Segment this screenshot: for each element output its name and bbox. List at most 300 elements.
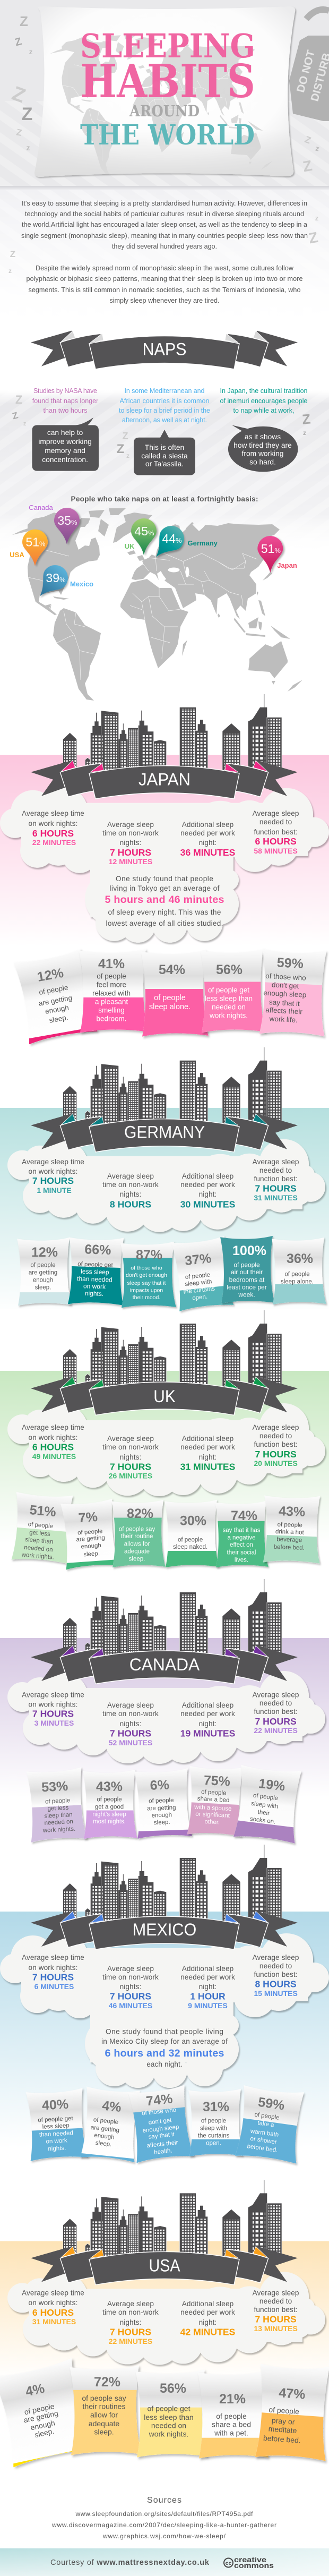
stat: sleep on work nights: on work nights: [29,2299,77,2307]
stat: sleep on non-work nights: nights: [120,1983,141,1991]
pillow: 4% enough sleep: of people [23,2402,55,2416]
naps background [0,390,329,555]
pillow: 7% enough sleep: 7% [78,1509,98,1525]
map pin: Mexico 39% [30,560,93,604]
icon: sleeping z letters around pillow: Z [303,134,313,146]
callout: siesta bubble [134,430,195,475]
stat: sleep on work nights: Average sleep time [22,1954,84,1961]
pillow: 31% curtains open: the curtains [198,2133,229,2139]
callout: Tokyo sleep [105,875,224,927]
banner: UK: UK [153,1387,176,1406]
map pin: Japan 51%: 51% [261,542,281,556]
map pin: Germany 44%: 44% [162,532,182,545]
stat: sleep on work nights: 22 MINUTES [32,838,76,847]
cloud: Canada [7,1671,325,1764]
pillow: 7% enough sleep: enough [81,1542,101,1550]
pillow: 43% good night's sleep: of people [97,1796,122,1803]
stat: additional sleep needed [180,2300,236,2337]
stat: sleep on non-work nights: time on non-work [102,1710,159,1718]
icon: do not disturb door hanger [289,10,329,121]
stat: sleep on non-work nights: Average sleep [107,1172,154,1180]
stat: sleep on non-work nights [102,1701,159,1747]
callout: Mexico City sleep: each night. [146,2060,183,2068]
title: THE WORLD [80,119,255,151]
pillow: 87% mood [119,1242,179,1311]
pillow: 19% socks on [233,1768,303,1846]
pillow: 12% enough sleep: 12% [36,966,65,985]
stat: sleep on work nights: on work nights: [29,1701,77,1708]
pillow: 87% mood: their mood. [133,1294,160,1301]
callout: Tokyo sleep: One study found that people [116,875,213,883]
pillow: 56% less sleep: 56% [160,2381,186,2396]
banner: naps: NAPS [142,340,187,359]
skyline: Japan [63,694,282,774]
icon: z letters around naps text: z [23,421,27,427]
stat: sleep on non-work nights [102,1172,159,1210]
stat: sleep on work nights [22,809,84,847]
stat: sleep on work nights: Average sleep time [22,1158,84,1166]
pillow: 51% less sleep: needed on [24,1545,53,1553]
pillow: 87% mood: sleep say that it [127,1280,166,1286]
stat: sleep needed to function: 20 MINUTES [254,1459,298,1468]
pillow: 37% curtains open: of people [185,1272,211,1281]
intro text: they did several hundred years ago. [112,243,217,250]
pillow: 12% enough sleep: enough [33,1277,53,1283]
pillow: 74% health: don't get [148,2117,172,2126]
pillow: 47% pray or meditate: pray or [271,2416,295,2426]
pillow: 40% less sleep: less sleep [42,2122,70,2130]
pillow: 41% relaxed: 41% [98,957,125,971]
pillow: 72% routines: of people say [82,2394,126,2402]
pillow: 6% enough sleep [133,1768,195,1842]
stat: sleep on non-work nights: nights: [120,1720,141,1728]
pillow: 56% less sleep: of people get [208,986,249,994]
pillow: 4% enough sleep: are getting [90,2125,120,2134]
stat: sleep on non-work nights: 46 MINUTES [109,2001,152,2010]
pillow: 4% enough sleep: enough [30,2418,56,2432]
pillow: 4% enough sleep: enough [94,2133,115,2141]
icon: sleeping z letters around pillow: z [315,144,321,153]
icon: sleeping z letters around pillow: Z [20,13,28,29]
pillow: 47% pray or meditate: meditate [268,2424,297,2435]
banner: UK [31,1377,298,1415]
pillow: 74% social lives [213,1501,272,1571]
panel: Germany [0,1047,329,1316]
icon: sleeping z letters around pillow: Z [9,82,28,107]
callout: Mexico City sleep: 6 hours and 32 minutes [105,2048,224,2059]
pillow: 41% relaxed [80,950,148,1036]
icon: sleeping z letters around pillow [8,13,321,275]
map pin: Germany 44%: Germany [188,539,218,547]
skyline: Mexico [63,1845,282,1924]
pillow: 12% enough sleep [15,950,100,1046]
cloud: UK [7,1403,325,1496]
pillow: 43% good night's sleep: night's sleep [92,1811,126,1818]
stat: sleep on work nights: 7 HOURS [32,1972,74,1982]
stat: sleep on non-work nights: Average sleep [107,1965,154,1973]
pillow: 72% routines: adequate [89,2419,119,2428]
stat: sleep on non-work nights [102,1435,159,1480]
pillow: 59% warm bath: before bed. [247,2143,278,2154]
heading: map: People who take naps on at least a fortnightly basis: [71,495,258,503]
icon: sleeping z letters around pillow: z [29,48,33,56]
pillow: 51% less sleep [12,1492,74,1566]
pillow: 56% less sleep: work nights. [209,1011,248,1020]
pillow: 87% mood: impacts upon [130,1287,163,1294]
stat: additional sleep needed: needed per work [180,1181,235,1189]
pillow: 74% social lives: say that it has [223,1528,261,1534]
stat: sleep on non-work nights: time on non-work [102,1973,159,1981]
intro text: Despite the widely spread norm of monophasic sleep in the west, some cultures follow [36,265,294,272]
stat: additional sleep needed: 19 MINUTES [180,1728,236,1739]
text block: Mediterranean naps [119,387,210,424]
cloud: Mexico [0,1932,329,2088]
pillow: 66% less sleep [68,1238,125,1308]
stat: sleep on non-work nights: time on non-work [102,1181,159,1189]
pillow: 75% share a bed: other. [204,1819,220,1826]
pillow: 30% sleep naked [163,1500,222,1571]
icon: do not disturb door hanger: DO NOT [295,49,317,94]
stat: sleep on work nights: 7 HOURS [32,1175,74,1186]
sources [51,2496,276,2540]
pillow: 82% routine: sleep. [129,1556,145,1563]
callout: siesta bubble: called a siesta [141,452,188,460]
text block: NASA naps: than two hours [44,407,87,414]
icon: z letters around naps text: z [303,429,306,437]
pillow: 4% enough sleep: sleep. [95,2140,112,2148]
stat: sleep needed to function [253,809,299,855]
pillow: 37% curtains open: sleep with [185,1278,212,1287]
callout: memory bubble [32,417,99,471]
icon: sleeping z letters around pillow: Z [307,229,319,246]
pillow: 12% enough sleep: sleep. [35,1284,51,1291]
stat: sleep on non-work nights: nights: [120,1190,141,1198]
pillow: 37% curtains open: the curtains [183,1286,215,1295]
pillow: 82% routine: adequate [124,1549,150,1555]
pillow: 59% work life: say that it [269,998,300,1008]
icon: z letters around naps text [11,393,311,459]
pillow: 59% warm bath: or shower [250,2136,278,2146]
stat: sleep on work nights: 6 MINUTES [34,1982,74,1991]
header background [0,0,329,329]
panel: Mexico [0,1845,329,2169]
skyline: Canada [63,1579,282,1659]
banner: Canada [31,1645,298,1684]
pillow: 74% social lives: a negative [227,1535,256,1541]
stat: sleep on non-work nights: time on non-work [102,1443,159,1451]
stat: sleep needed to function: 58 MINUTES [254,847,298,855]
intro text: single segment (monophasic sleep), meaning that in many countries people sleep less now than [21,232,308,240]
stat: sleep needed to function: Average sleep [253,2289,299,2297]
stat: sleep on non-work nights: time on non-work [102,2308,159,2316]
stat: sleep on non-work nights: 7 HOURS [110,847,151,858]
pillow: 19% socks on: socks on. [249,1816,276,1826]
map pin: Mexico 39%: 39% [46,571,66,585]
pillow: 6% enough sleep: enough [151,1812,172,1819]
stat: sleep on non-work nights: nights: [120,1453,141,1461]
stat: sleep on non-work nights: time on non-work [102,829,159,837]
stat: additional sleep needed: 30 MINUTES [180,1199,236,1210]
pillow: 12% enough sleep: are getting [29,1269,57,1276]
pillow: 59% warm bath: of people [254,2111,280,2121]
sources: Sources [147,2496,181,2505]
pillow: 54% sleep alone: sleep alone. [149,1003,191,1011]
pillow: 74% social lives: effect on [230,1542,253,1548]
pillow: 66% less sleep: than needed [77,1275,112,1284]
callout: tired oval bubble: from working [242,449,283,458]
callout: Tokyo sleep: lowest average of all cities studied. [106,919,223,927]
pillow: 56% less sleep: needed on [212,1003,246,1011]
stat: additional sleep needed [180,1435,236,1472]
pillow: 4% enough sleep: of people [93,2117,119,2126]
pillow: 51% less sleep: work nights. [21,1551,54,1561]
icon: sleeping z letters around pillow: Z [15,127,23,138]
pillow: 6% enough sleep: 6% [150,1778,169,1793]
stat: sleep needed to function: 22 MINUTES [254,1726,298,1735]
banner: Mexico [31,1911,298,1949]
pillow: 37% curtains open: 37% [184,1251,212,1268]
pillow: 72% routines: 72% [94,2375,120,2390]
stat: additional sleep needed: needed per work [180,829,235,837]
callout: siesta bubble: This is often [145,443,184,451]
pillow: 59% work life: 59% [276,955,304,971]
pillow: 30% sleep naked: of people [178,1537,203,1543]
text block: Mediterranean naps: African countries it is common [120,397,210,405]
pillow: 82% routine [110,1500,169,1571]
stat: sleep on non-work nights [102,821,159,866]
stat: sleep on work nights: 1 MINUTE [37,1186,72,1195]
pillow: 53% less sleep: needed on [44,1819,73,1827]
pillow: 100% air out bedrooms: week. [238,1291,255,1298]
stat: sleep on work nights: on work nights: [29,1434,77,1441]
stat: sleep needed to function: needed to [259,2297,292,2305]
map pin: UK 45%: UK [125,542,135,550]
stat: additional sleep needed [180,1701,236,1739]
text block: Japan inemuri: to nap while at work, [233,407,294,414]
map pin: Japan 51% [257,536,297,573]
stat: additional sleep needed: 9 MINUTES [188,2001,228,2010]
pillow: 6% enough sleep: of people [149,1797,174,1804]
pillow: 100% air out bedrooms: bedrooms at [229,1276,265,1283]
pillow: 75% share a bed [187,1772,243,1839]
stat: sleep needed to function: 7 HOURS [255,2314,297,2324]
pillow: 37% curtains open [173,1236,236,1313]
stat: additional sleep needed: night: [199,2318,217,2326]
pillow: 51% less sleep: get less [29,1529,51,1538]
stat: sleep needed to function: needed to [259,1166,292,1174]
stat: sleep needed to function: 8 HOURS [255,1979,297,1990]
stat: sleep needed to function: function best: [254,1708,298,1716]
pillow: 51% less sleep: of people [28,1521,53,1530]
pillow: 75% share a bed: or significant [195,1811,230,1819]
skyline: UK [63,1310,282,1390]
icon: z letters around naps text: z [126,452,129,459]
pillow: 59% work life: of those who [265,972,306,982]
pillow: 12% enough sleep: 12% [31,1245,58,1260]
pillow: 59% work life [259,950,328,1039]
pillow: 87% mood: don't get enough [126,1272,167,1278]
stat: additional sleep needed [180,1965,235,2010]
pillow: 4% enough sleep [0,2358,75,2470]
stat: sleep on non-work nights: 26 MINUTES [109,1471,152,1480]
text block: Mediterranean naps: to sleep for a brief period in the [119,407,210,414]
map pin: USA 51%: 51% [25,535,46,549]
title: HABITS [80,55,255,108]
banner: naps [31,331,298,369]
pillow: 66% less sleep: less sleep [81,1268,109,1276]
pillow: 43% hot beverage: 43% [279,1504,306,1520]
pillow: 74% health: enough sleep [142,2124,179,2134]
pillow: 100% air out bedrooms: of people [233,1261,260,1268]
stat: additional sleep needed: Additional sleep [182,1435,233,1443]
map pin: Japan 51%: Japan [277,561,297,569]
pillow: 41% relaxed: a pleasant [95,997,128,1006]
pillow: 59% work life: don't get [272,980,299,990]
pillow: 4% enough sleep: 4% [24,2381,46,2399]
callout: tired oval bubble: how tired they are [233,441,292,449]
pillow: 56% less sleep: less sleep than [144,2413,194,2421]
stat: additional sleep needed: Additional sleep [182,2300,233,2308]
stat: additional sleep needed [180,821,236,858]
stat: sleep on work nights: Average sleep time [22,1423,84,1431]
stat: sleep on work nights: 6 HOURS [32,2307,74,2318]
icon: z letters around naps text: Z [301,411,311,428]
pillow: 43% good night's sleep: most nights. [93,1819,126,1825]
stat: sleep needed to function: needed to [259,1962,292,1970]
banner: Japan: JAPAN [138,770,191,789]
intro text: polyphasic or biphasic sleep patterns, meaning that their sleep is broken up into two or more [27,275,302,283]
pillow: 59% work life: work life. [269,1014,298,1024]
pillow: 41% relaxed: bedroom. [96,1014,127,1023]
title [80,27,255,151]
pillow: 66% less sleep: of people get [77,1261,114,1269]
pillow: 87% mood: of those who [131,1265,162,1272]
pillow: 21% share a bed with a pet: of people [216,2412,247,2420]
pillow: 56% less sleep: needed on [151,2421,186,2429]
pillow: 72% routines: their routines [83,2402,125,2410]
pillow: 51% less sleep: sleep than [25,1537,54,1545]
stat: sleep needed to function: function best: [254,1971,298,1978]
icon: sleeping z letters around pillow: z [8,267,12,275]
icon: z letters around naps text: Z [117,442,124,456]
stat: additional sleep needed: needed per work [180,1973,235,1981]
stat: sleep on non-work nights: 8 HOURS [110,1199,151,1210]
intro text: segments. This is still common in nomadic societies, such as the Temiars of Indonesia, who [29,286,300,294]
pillow: 41% relaxed: feel more [97,980,126,989]
text block: NASA naps: found that naps longer [32,397,98,405]
text block: Japan inemuri [220,387,308,414]
intro text [21,200,308,304]
stat: sleep needed to function: Average sleep [253,809,299,817]
pillow: 53% less sleep: sleep than [44,1812,73,1820]
icon: sleeping z letters around pillow: Z [14,36,23,48]
pillow: 75% share a bed: share a bed [197,1796,230,1804]
intro text: It's easy to assume that sleeping is a pretty standardised human activity. However, differences in [22,200,307,207]
callout: Mexico City sleep: One study found that people living [106,2028,223,2035]
sources: www.graphics.wsj.com/how-we-sleep/ [102,2532,226,2540]
pillow: 47% pray or meditate: before bed. [263,2434,301,2445]
callout: memory bubble: can help to [47,429,83,437]
stat: additional sleep needed: Additional sleep [182,1701,233,1709]
stat: additional sleep needed: needed per work [180,1443,235,1451]
stat: sleep on work nights: 31 MINUTES [32,2317,76,2326]
pillow: 82% routine: of people say [119,1526,155,1533]
stat: sleep on work nights [22,1423,84,1461]
stat: sleep on non-work nights [102,2300,159,2345]
footer [0,2548,329,2576]
stat: sleep on non-work nights: 7 HOURS [110,1462,151,1472]
pillow: 75% share a bed: 75% [203,1773,231,1789]
text block: NASA naps [32,387,98,414]
stat: sleep on work nights: 7 HOURS [32,1708,74,1719]
callout: Tokyo sleep: living in Tokyo get an average of [109,884,220,892]
icon: sleeping z letters around pillow: z [315,214,319,222]
pillow: 36% sleep alone [270,1238,329,1308]
pillow: 75% share a bed: with a spouse [194,1804,232,1812]
pillow: 7% enough sleep [59,1498,122,1573]
callout: siesta bubble: or Ta'assila. [145,460,184,468]
icon: sleeping z letters around pillow: z [27,143,30,152]
stat: sleep needed to function [253,1423,299,1468]
pillow: 100% air out bedrooms: 100% [232,1243,266,1258]
pillow: 53% less sleep: of people [45,1797,71,1805]
pillow: 31% curtains open: of people [201,2118,226,2125]
pillow: 74% health: of those who [142,2107,177,2117]
pillow: 21% share a bed with a pet: 21% [219,2392,246,2407]
callout: Mexico City sleep: in Mexico City sleep for an average of [101,2037,228,2045]
stat: sleep needed to function: 13 MINUTES [254,2324,298,2333]
map pin: Germany 44% [146,521,218,565]
pillow: 31% curtains open [187,2089,246,2161]
stat: sleep needed to function: function best: [254,1440,298,1448]
pillow: 75% share a bed: of people [201,1789,227,1797]
pillow: 47% pray or meditate: 47% [278,2385,306,2402]
stat: sleep on non-work nights: nights: [120,2318,141,2326]
stat: sleep needed to function: function best: [254,2306,298,2314]
pillow: 59% warm bath: warm bath [249,2128,279,2138]
stat: sleep on work nights: 6 HOURS [32,828,74,839]
stat: sleep needed to function: Average sleep [253,1954,299,1961]
pillow: 74% social lives: their social [227,1550,256,1556]
pillow: 66% less sleep: nights. [85,1290,103,1298]
pillow: 6% enough sleep: sleep. [154,1819,170,1826]
icon: sleeping z letters around pillow: Z [10,249,15,259]
stat: additional sleep needed: 42 MINUTES [180,2326,236,2337]
stat: sleep on non-work nights: 7 HOURS [110,1991,151,2001]
stat: sleep needed to function [253,1691,299,1735]
stat: sleep needed to function [253,1158,299,1202]
pillow: 43% hot beverage: beverage [276,1537,302,1543]
pillow: 59% work life: affects their [265,1006,303,1016]
pillow: 43% hot beverage [263,1496,322,1566]
skyline: Germany [63,1047,282,1127]
icon: sleeping z letters around pillow: Z [22,104,32,124]
banner: Germany: GERMANY [124,1123,205,1142]
pillow: 12% enough sleep: are getting [38,994,73,1008]
callout: memory bubble: improve working [38,438,92,446]
pillow: 56% less sleep [134,2369,212,2461]
callout: Mexico City sleep [101,2028,228,2068]
map pin: Canada 35% [29,504,80,544]
map pin: USA 51%: USA [10,551,24,559]
stat: additional sleep needed: 31 MINUTES [180,1462,236,1472]
stat: sleep on non-work nights: Average sleep [107,2300,154,2308]
stat: sleep needed to function [253,2289,299,2333]
text block: Japan inemuri: of inemuri encourages people [220,397,308,405]
footer: Courtesy of www.mattressnextday.co.uk [50,2558,210,2567]
stat: sleep needed to function: needed to [259,1699,292,1707]
pillow: 7% enough sleep: sleep. [83,1550,100,1558]
